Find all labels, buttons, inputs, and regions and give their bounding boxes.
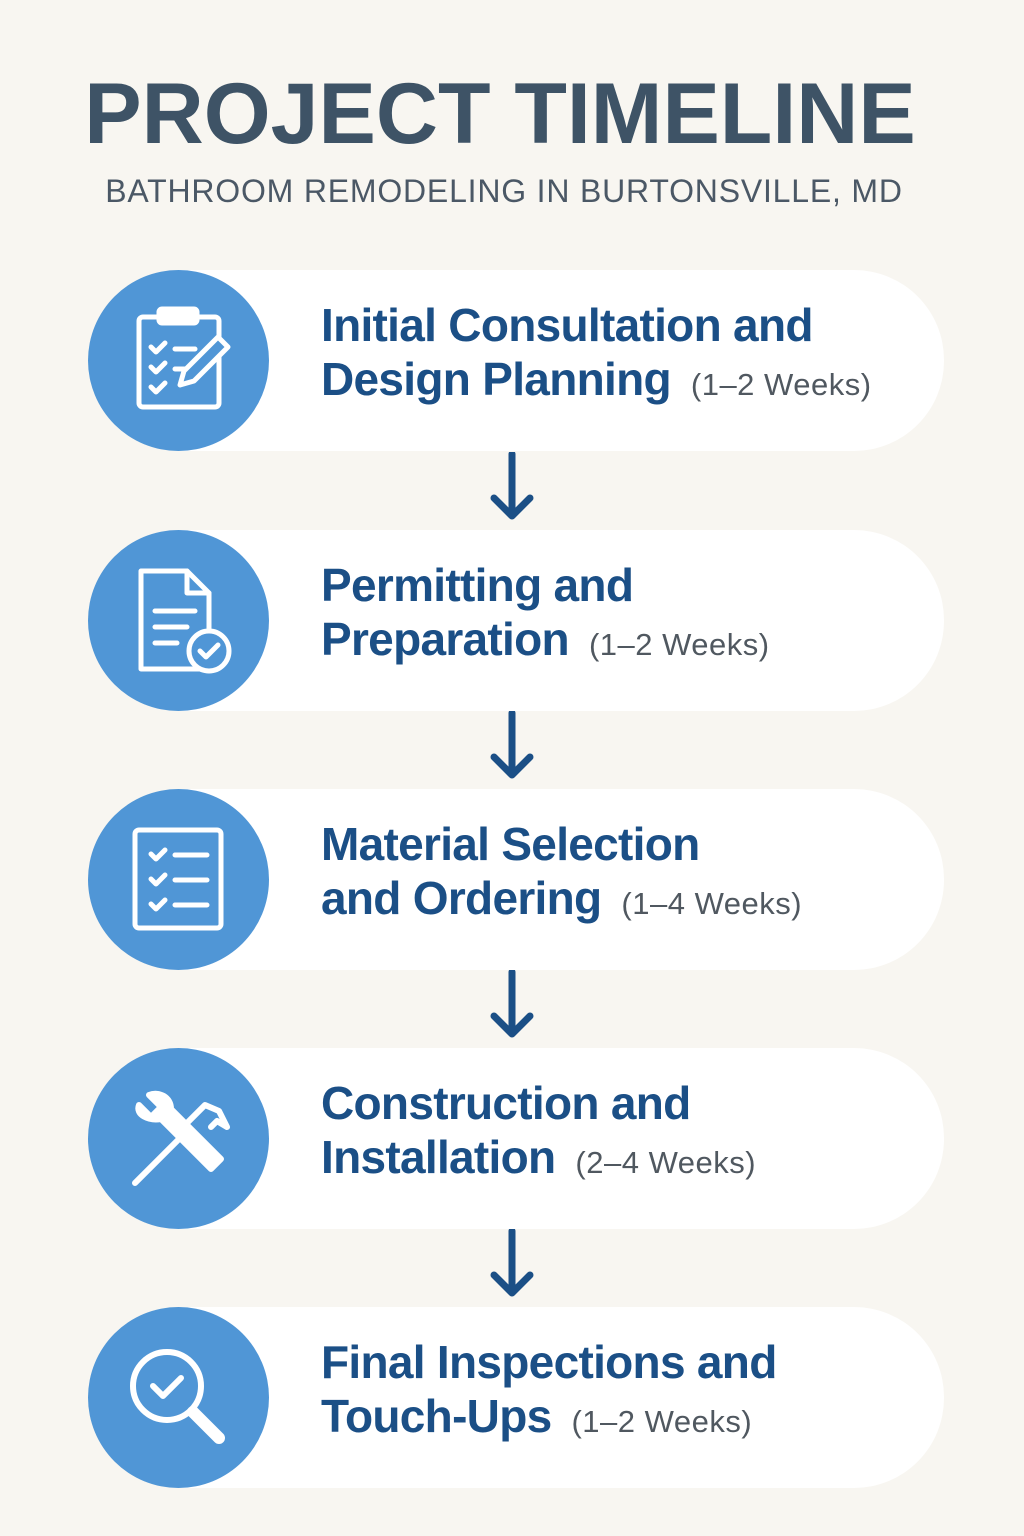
heading: Permitting and [321, 559, 633, 611]
heading: and Ordering (1–4 Weeks) [321, 872, 802, 924]
heading [321, 299, 872, 405]
heading: Touch-Ups (1–2 Weeks) [321, 1390, 752, 1442]
icon: checklist [88, 789, 269, 970]
heading [321, 1077, 756, 1183]
icon: clipboard [88, 270, 269, 451]
arrow [490, 711, 534, 778]
arrow [490, 1229, 534, 1296]
icon: document check [88, 530, 269, 711]
arrow [490, 452, 534, 520]
heading [321, 559, 770, 665]
heading: Construction and [321, 1077, 691, 1129]
icon: tools [88, 1048, 269, 1229]
step 1: consultation [88, 270, 944, 451]
heading [321, 818, 802, 924]
subtitle: BATHROOM REMODELING IN BURTONSVILLE, MD [105, 173, 903, 209]
heading [321, 1336, 777, 1442]
heading: Material Selection [321, 818, 700, 870]
arrow [490, 970, 534, 1038]
heading: Design Planning (1–2 Weeks) [321, 353, 872, 405]
step 4: construction [88, 1048, 944, 1229]
heading: Initial Consultation and [321, 299, 813, 351]
icon: magnifier check [88, 1307, 269, 1488]
heading: Installation (2–4 Weeks) [321, 1131, 756, 1183]
heading: Final Inspections and [321, 1336, 777, 1388]
title: PROJECT TIMELINE [84, 66, 916, 162]
heading: Preparation (1–2 Weeks) [321, 613, 770, 665]
step 2: permitting [88, 530, 944, 711]
step 5: inspections [88, 1307, 944, 1488]
step 3: materials [88, 789, 944, 970]
